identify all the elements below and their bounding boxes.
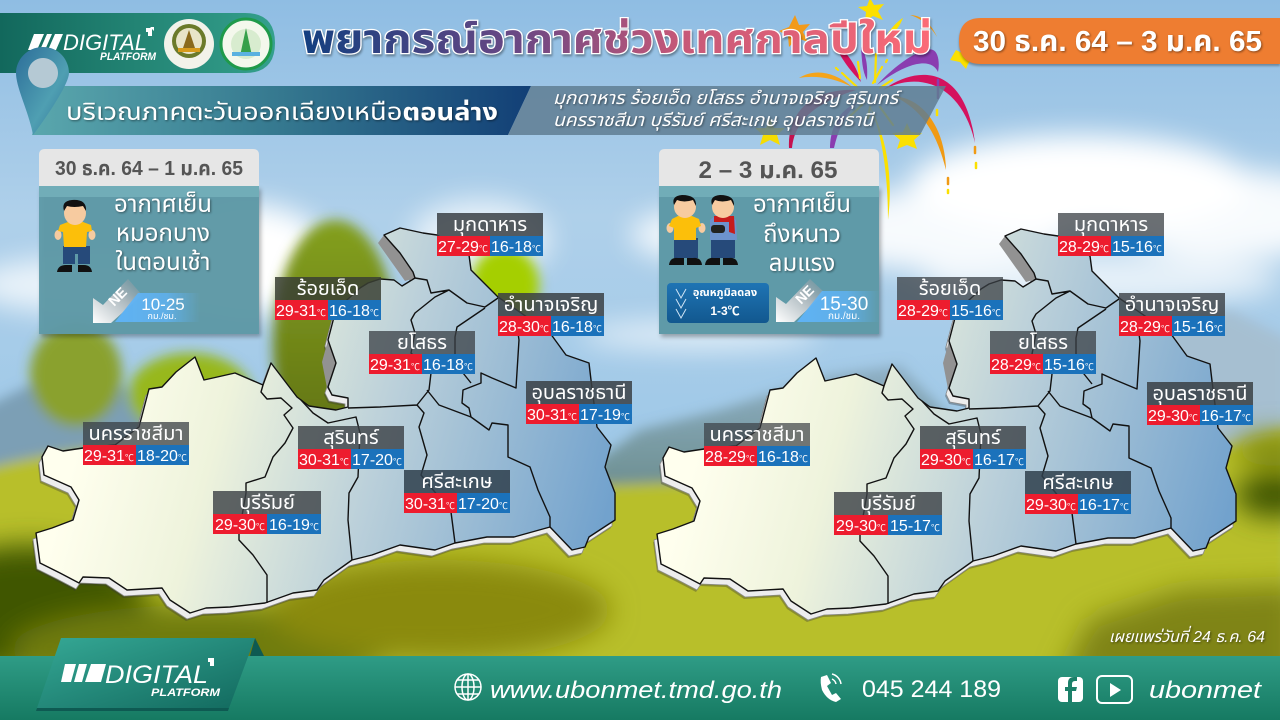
wind: NE [105, 284, 130, 309]
label: Mukdahan: 15-16℃ [1112, 239, 1162, 256]
map: left period [32, 228, 615, 621]
panel conditions: อากาศเย็น [114, 190, 212, 218]
label: Nakhon Ratchasima: 16-18℃ [758, 449, 808, 466]
seal: royal irrigation [164, 19, 214, 69]
label: Yasothon: 28-29℃ [991, 357, 1041, 374]
label: Mukdahan: มุกดาหาร [1074, 214, 1148, 236]
label: Nakhon Ratchasima: นครราชสีมา [709, 424, 805, 446]
label: Roi Et [275, 277, 381, 320]
wind: กม./ชม. [148, 311, 176, 321]
map: right period [653, 229, 1236, 622]
label: Yasothon [369, 331, 475, 374]
label: Nakhon Ratchasima [83, 422, 189, 465]
panel conditions: ในตอนเช้า [116, 249, 210, 276]
label: Sisaket [404, 470, 510, 513]
temperature drop badge: อุณหภูมิลดลง [693, 287, 757, 299]
label: Yasothon: 15-16℃ [1044, 357, 1094, 374]
wind: NE [792, 282, 817, 307]
label: Buriram [834, 492, 942, 535]
labels: right map [704, 213, 1253, 535]
wind: 10-25 [141, 295, 185, 314]
label: Amnat Charoen: อำนาจเจริญ [1125, 294, 1219, 316]
label: Surin [298, 426, 404, 469]
region ribbon [32, 86, 946, 135]
label: Yasothon [990, 331, 1096, 374]
icon: location pin [16, 47, 69, 135]
panel conditions: หมอกบาง [116, 220, 210, 247]
wind [93, 279, 200, 323]
footer logo [36, 638, 264, 711]
label: Nakhon Ratchasima [704, 423, 810, 466]
label: Nakhon Ratchasima: 18-20℃ [137, 448, 187, 465]
label: Surin [920, 426, 1026, 469]
fireworks [755, 0, 976, 220]
website: www.ubonmet.tmd.go.th [490, 677, 782, 704]
label: Roi Et: ร้อยเอ็ด [919, 277, 981, 300]
phone number: 045 244 189 [862, 676, 1001, 703]
label: Ubon Ratchathani [526, 381, 632, 424]
label: Ubon Ratchathani: 29-30℃ [1148, 408, 1198, 425]
label: Roi Et: 29-31℃ [276, 303, 326, 320]
digital platform logo: DIGITAL [63, 30, 147, 55]
digital platform logo: PLATFORM [100, 51, 157, 63]
label: Mukdahan: 16-18℃ [491, 239, 541, 256]
label: Buriram: 29-30℃ [836, 518, 886, 535]
label: Ubon Ratchathani [1147, 382, 1253, 425]
label: Ubon Ratchathani: 17-19℃ [580, 407, 630, 424]
icon: two people [666, 195, 738, 265]
label: Roi Et: ร้อยเอ็ด [297, 277, 359, 300]
label: Nakhon Ratchasima: 28-29℃ [705, 449, 755, 466]
top logo bar [0, 13, 275, 73]
social handle: ubonmet [1149, 677, 1263, 704]
province list [553, 88, 902, 131]
label: Amnat Charoen [1119, 293, 1225, 336]
label: Surin: 16-17℃ [974, 452, 1024, 469]
label: Ubon Ratchathani: อุบลราชธานี [531, 382, 627, 404]
label: Mukdahan: 28-29℃ [1059, 239, 1109, 256]
date pill [959, 18, 1280, 64]
label: Surin: 29-30℃ [921, 452, 971, 469]
label: Amnat Charoen: 16-18℃ [552, 319, 602, 336]
label: Surin: 17-20℃ [352, 452, 402, 469]
label: Mukdahan [1058, 213, 1164, 256]
label: Sisaket: ศรีสะเกษ [1042, 472, 1114, 494]
panel conditions: ลมแรง [769, 250, 835, 277]
panel date: 2 – 3 ม.ค. 65 [698, 157, 838, 184]
label: Yasothon: ยโสธร [1018, 332, 1068, 354]
label: Buriram: 29-30℃ [215, 517, 265, 534]
label: Buriram [213, 491, 321, 534]
panel conditions: ถึงหนาว [763, 221, 841, 248]
main title: พยากรณ์อากาศช่วงเทศกาลปีใหม่ [302, 16, 932, 62]
date pill: 30 ธ.ค. 64 – 3 ม.ค. 65 [973, 26, 1262, 58]
seal: meteorological department [221, 19, 271, 69]
wind: 15-30 [820, 294, 868, 315]
label: Buriram: 16-19℃ [269, 517, 319, 534]
icon: youtube [1097, 676, 1132, 703]
temperature drop badge [667, 283, 769, 323]
label: Yasothon: 16-18℃ [423, 357, 473, 374]
label: Nakhon Ratchasima: 29-31℃ [84, 448, 134, 465]
label: Roi Et: 16-18℃ [329, 303, 379, 320]
label: Sisaket: 16-17℃ [1079, 497, 1129, 514]
label: Roi Et [897, 277, 1003, 320]
label: Amnat Charoen: 28-30℃ [499, 319, 549, 336]
label: Sisaket [1025, 471, 1131, 514]
footer bar [0, 638, 1280, 720]
panel: 30 Dec - 1 Jan [39, 149, 259, 334]
digital platform logo [28, 27, 157, 63]
icon: globe [455, 674, 481, 700]
footer logo: PLATFORM [151, 687, 221, 699]
panel conditions: อากาศเย็น [753, 190, 851, 218]
wind [776, 279, 880, 322]
label: Buriram: บุรีรัมย์ [239, 492, 295, 514]
province list: นครราชสีมา บุรีรัมย์ ศรีสะเกษ อุบลราชธานี [553, 110, 875, 131]
stars [755, 0, 972, 149]
icon: facebook [1058, 677, 1083, 702]
label: Sisaket: 30-31℃ [405, 496, 455, 513]
label: Amnat Charoen [498, 293, 604, 336]
label: Sisaket: ศรีสะเกษ [421, 471, 493, 493]
region heading: บริเวณภาคตะวันออกเฉียงเหนือ ตอนล่าง [66, 98, 498, 126]
publish date: เผยแพร่วันที่ 24 ธ.ค. 64 [1109, 625, 1265, 646]
label: Surin: สุรินทร์ [945, 427, 1002, 449]
label: Sisaket: 29-30℃ [1026, 497, 1076, 514]
label: Mukdahan: มุกดาหาร [453, 214, 527, 236]
footer logo: DIGITAL [105, 661, 208, 689]
label: Sisaket: 17-20℃ [458, 496, 508, 513]
label: Surin: 30-31℃ [299, 452, 349, 469]
temperature drop badge: 1-3℃ [710, 304, 740, 318]
label: Amnat Charoen: 15-16℃ [1173, 319, 1223, 336]
label: Amnat Charoen: อำนาจเจริญ [504, 294, 598, 316]
panel conditions [753, 190, 851, 277]
label: Ubon Ratchathani: 16-17℃ [1201, 408, 1251, 425]
label: Surin: สุรินทร์ [323, 427, 380, 449]
label: Ubon Ratchathani: อุบลราชธานี [1152, 383, 1248, 405]
wind: กม./ชม. [828, 311, 860, 322]
province list: มุกดาหาร ร้อยเอ็ด ยโสธร อำนาจเจริญ สุรินทร์ [553, 88, 902, 109]
label: Buriram: 15-17℃ [890, 518, 940, 535]
label: Yasothon: 29-31℃ [370, 357, 420, 374]
panel: 2-3 Jan [659, 149, 880, 334]
labels: left map [83, 213, 632, 534]
label: Ubon Ratchathani: 30-31℃ [527, 407, 577, 424]
panel date: 30 ธ.ค. 64 – 1 ม.ค. 65 [55, 158, 243, 180]
label: Amnat Charoen: 28-29℃ [1120, 319, 1170, 336]
panel conditions [114, 190, 212, 276]
label: Buriram: บุรีรัมย์ [860, 493, 916, 515]
label: Roi Et: 28-29℃ [898, 303, 948, 320]
icon: person in t-shirt [54, 200, 96, 272]
label: Nakhon Ratchasima: นครราชสีมา [88, 423, 184, 445]
label: Roi Et: 15-16℃ [951, 303, 1001, 320]
label: Yasothon: ยโสธร [397, 332, 447, 354]
label: Mukdahan: 27-29℃ [438, 239, 488, 256]
icon: phone [821, 674, 841, 702]
label: Mukdahan [437, 213, 543, 256]
